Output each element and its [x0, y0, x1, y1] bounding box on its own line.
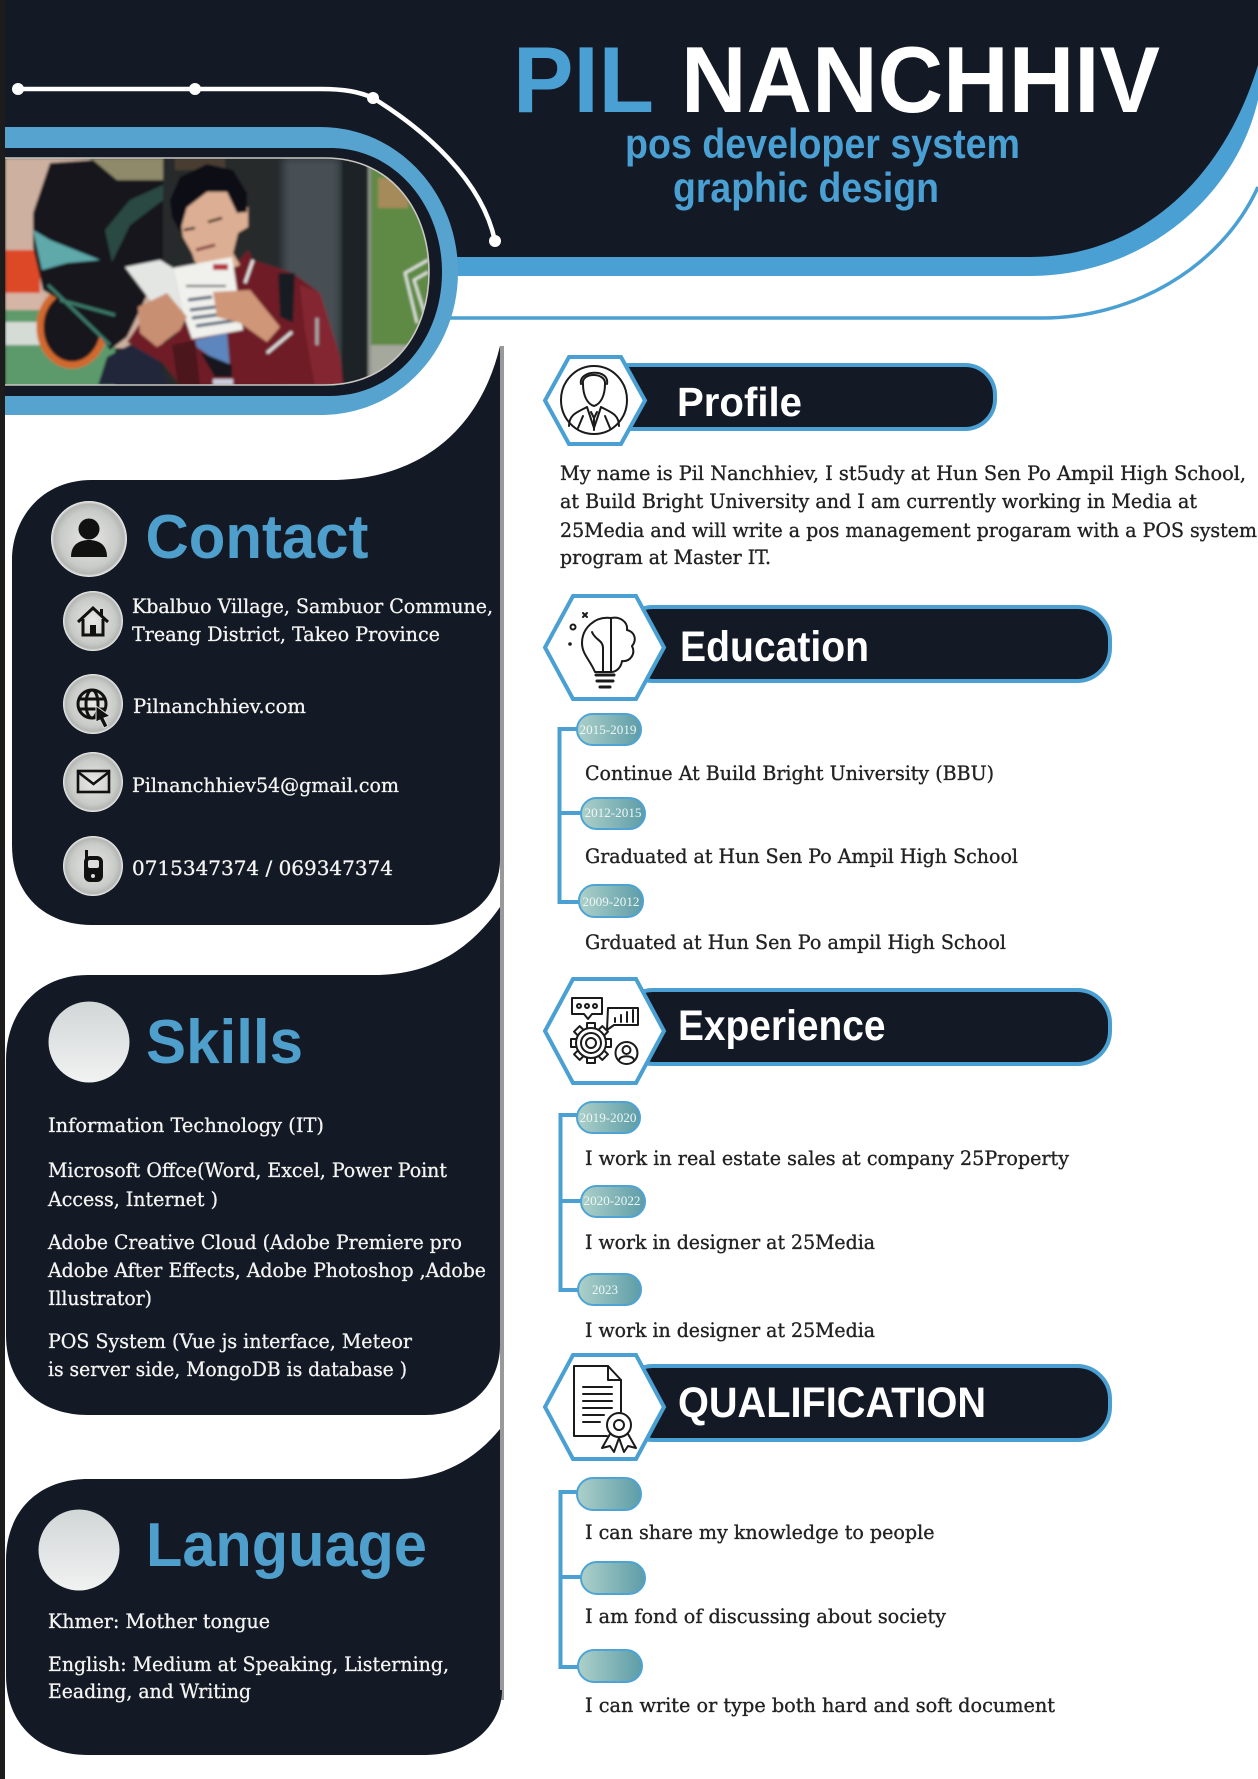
- pill: 2015-2019: [577, 714, 641, 745]
- icon: envelope: [63, 752, 123, 812]
- skills list: Adobe After Effects, Adobe Photoshop ,Adobe: [47, 1258, 486, 1282]
- left page edge: [0, 0, 5, 1779]
- contact address: [132, 594, 493, 646]
- education item 1: Continue At Build Bright University (BBU): [585, 761, 994, 785]
- pill: 2023: [578, 1274, 641, 1305]
- pill: 2020-2022: 2020-2022: [584, 1193, 640, 1208]
- heading: qualification: QUALIFICATION: [678, 1379, 986, 1427]
- heading: education: Education: [680, 623, 869, 671]
- language list: Eeading, and Writing: [48, 1679, 251, 1703]
- panel: skills: [6, 907, 500, 1415]
- subtitle: graphic design: [673, 164, 939, 211]
- panel: language: [6, 1429, 502, 1755]
- photo outline: [5, 158, 429, 385]
- skills list: Adobe Creative Cloud (Adobe Premiere pro: [47, 1230, 462, 1254]
- section: experience header: [545, 979, 1110, 1083]
- panel: contact: [12, 346, 500, 925]
- experience timeline: [560, 1102, 1070, 1342]
- skills list: Illustrator): [48, 1286, 152, 1310]
- skills list: POS System (Vue js interface, Meteor: [48, 1329, 412, 1353]
- profile text: at Build Bright University and I am currently working in Media at: [560, 489, 1197, 513]
- qualification item 1: I can share my knowledge to people: [585, 1520, 934, 1544]
- header banner: [5, 0, 1258, 318]
- photo: young man reading a book beside a motorbike: [5, 158, 436, 388]
- icon: home: [63, 591, 123, 651]
- pill: blank 2: [581, 1562, 645, 1594]
- language list: English: Medium at Speaking, Listerning,: [48, 1652, 449, 1676]
- pill: 2012-2015: [581, 798, 645, 829]
- decorative timeline with dots: [12, 83, 501, 247]
- heading: language: Language: [146, 1511, 427, 1580]
- education item 3: Grduated at Hun Sen Po ampil High School: [585, 930, 1006, 954]
- skills list: [47, 1113, 486, 1381]
- icon: certificate: [574, 1366, 636, 1452]
- skills list: is server side, MongoDB is database ): [48, 1357, 407, 1381]
- profile text: program at Master IT.: [560, 545, 771, 569]
- title: NANCHHIV: [681, 27, 1160, 132]
- section: qualification header: [545, 1355, 1110, 1459]
- contact address: Treang District, Takeo Province: [132, 622, 440, 646]
- sidebar vertical rule: [500, 346, 504, 1700]
- photo capsule frame: [5, 127, 458, 415]
- contact email: Pilnanchhiev54@gmail.com: [132, 773, 399, 797]
- qualification timeline: [560, 1478, 1055, 1717]
- education timeline: [560, 714, 1018, 954]
- pill: 2012-2015: 2012-2015: [584, 805, 642, 820]
- pill: 2009-2012: [579, 885, 643, 917]
- profile text: My name is Pil Nanchhiev, I st5udy at Hun Sen Po Ampil High School,: [560, 461, 1246, 485]
- skills list: Access, Internet ): [47, 1187, 218, 1211]
- experience item 3: I work in designer at 25Media: [585, 1318, 875, 1342]
- language list: Khmer: Mother tongue: [48, 1609, 270, 1633]
- pill: 2009-2012: 2009-2012: [582, 894, 640, 909]
- experience item 1: I work in real estate sales at company 25Property: [585, 1146, 1070, 1170]
- contact address: Kbalbuo Village, Sambuor Commune,: [132, 594, 493, 618]
- heading: experience: Experience: [678, 1002, 886, 1050]
- contact website: Pilnanchhiev.com: [133, 694, 306, 718]
- icon: globe: [63, 674, 123, 734]
- pill: 2015-2019: 2015-2019: [580, 722, 636, 737]
- profile text: [560, 461, 1257, 569]
- qualification item 3: I can write or type both hard and soft document: [585, 1693, 1055, 1717]
- subtitle: [625, 120, 1020, 211]
- pill: 2020-2022: [581, 1186, 645, 1217]
- skills list: Information Technology (IT): [48, 1113, 324, 1137]
- icon: skills placeholder disc: [48, 1002, 130, 1082]
- language list: [48, 1609, 449, 1703]
- subtitle: pos developer system: [625, 120, 1020, 167]
- icon: mobile phone: [63, 836, 123, 896]
- experience item 2: I work in designer at 25Media: [585, 1230, 875, 1254]
- heading: profile: Profile: [677, 379, 802, 425]
- pill: blank 1: [577, 1478, 641, 1510]
- pill: 2023: 2023: [592, 1282, 618, 1297]
- title: PIL: [513, 27, 654, 132]
- heading: contact: Contact: [146, 503, 368, 572]
- icon: contact person: [51, 501, 127, 577]
- pill: 2019-2020: 2019-2020: [580, 1110, 636, 1125]
- icon: brain bulb: [569, 613, 635, 687]
- skills list: Microsoft Offce(Word, Excel, Power Point: [48, 1158, 447, 1182]
- qualification item 2: I am fond of discussing about society: [585, 1604, 947, 1628]
- education item 2: Graduated at Hun Sen Po Ampil High School: [585, 844, 1018, 868]
- section: profile header: [545, 357, 995, 444]
- icon: gear and charts: [571, 998, 638, 1064]
- section: education header: [545, 596, 1110, 699]
- heading: skills: Skills: [146, 1008, 303, 1077]
- icon: language placeholder disc: [38, 1510, 120, 1590]
- pill: 2019-2020: [577, 1102, 640, 1133]
- pill: blank 3: [578, 1650, 642, 1682]
- contact phone: 0715347374 / 069347374: [132, 856, 393, 880]
- icon: businessman: [561, 366, 627, 434]
